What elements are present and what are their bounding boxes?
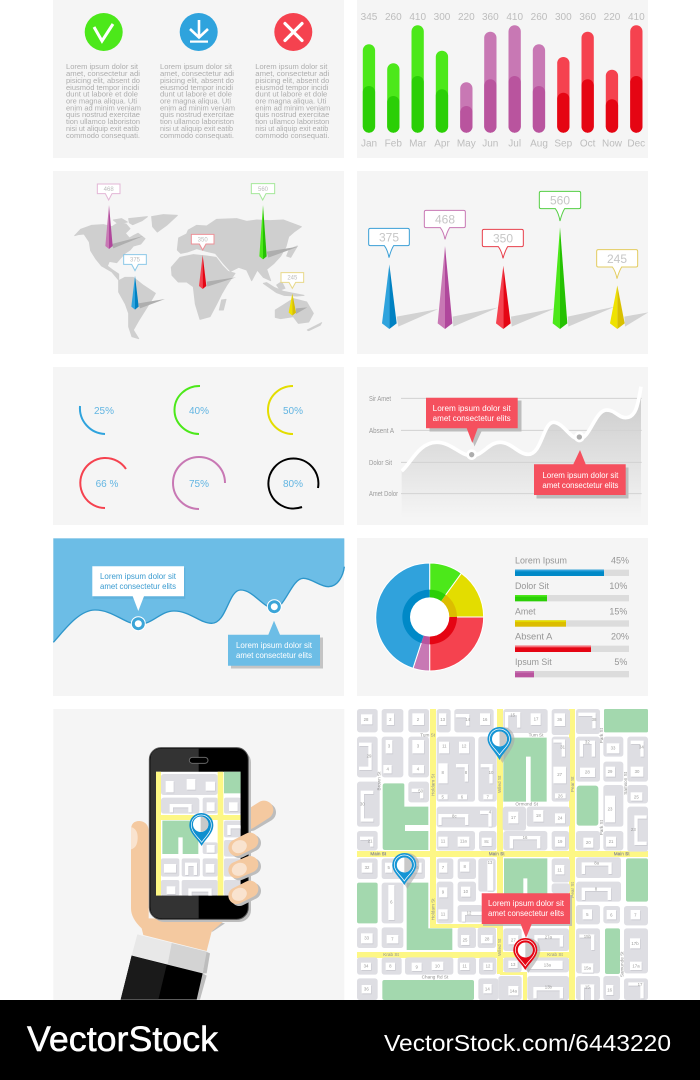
month labels: May: [457, 138, 476, 150]
map quadrant: north west: 10: [489, 770, 494, 775]
map quadrant: south east: 5: [586, 912, 589, 917]
bars: green Jan to Apr: [363, 25, 448, 133]
map quadrant: south west: 8: [463, 864, 466, 869]
pin: pink 468: 468: [435, 213, 455, 227]
map quadrant: north west: 4: [417, 766, 420, 771]
bar values: 300: [555, 12, 572, 23]
bar values: 410: [628, 12, 645, 23]
map quadrant: north west: 11: [441, 839, 446, 844]
map quadrant: south east: 16: [607, 988, 613, 993]
donut chart: [376, 563, 484, 671]
icon: three fingers: [230, 838, 253, 903]
world map: [75, 215, 322, 339]
map quadrant: south east: 13b: [545, 984, 553, 989]
map quadrant: north east: 29: [608, 769, 613, 774]
map quadrant: north west: Wiled St: [497, 775, 502, 793]
map quadrant: south west: 9: [415, 964, 418, 969]
text block: column three: enim ad minim veniam: [255, 104, 330, 112]
pin: green 560: [539, 191, 581, 329]
map quadrant: south east: 11: [557, 867, 563, 872]
map quadrant: south west: 6: [416, 865, 419, 870]
map quadrant: south east: 13a: [544, 963, 552, 968]
map quadrant: south east: 7: [634, 912, 637, 917]
map quadrant: south west: 34: [364, 964, 369, 969]
footer url: VectorStock.com/6443220: [384, 1030, 671, 1056]
gauge: 40%: [174, 386, 209, 434]
text block: column two: dunt ut labore et dole: [160, 90, 232, 98]
map quadrant: south east: 27a: [545, 934, 553, 939]
bar values: 410: [409, 12, 426, 23]
bar: Ipsum Sit: 5%: [614, 657, 627, 667]
map quadrant: north east: 19: [558, 839, 563, 844]
map quadrant: north west: 6: [461, 794, 464, 799]
map quadrant: north east: 32: [585, 740, 590, 745]
map quadrant: north west: 28: [364, 717, 369, 722]
map quadrant: north west: 4: [386, 766, 389, 771]
map quadrant: north west: 11: [442, 744, 447, 749]
pin: pink 468: [97, 184, 143, 249]
pin: blue 375: 375: [379, 231, 399, 245]
map quadrant: south west: 11: [441, 912, 446, 917]
map quadrant: north east: 36: [557, 717, 563, 722]
map quadrant: south west: Wiled St: [497, 938, 502, 956]
callout: blue: [228, 621, 323, 668]
text block: column one: pisicing elit, absent do: [66, 76, 140, 85]
map quadrant: north west: 8: [465, 770, 468, 775]
map quadrant: south west: 7: [442, 865, 445, 870]
map quadrant: south east: [498, 851, 648, 1000]
bar: Absent A: 20%: [611, 632, 629, 642]
panel: 3D pins chart: [357, 171, 648, 354]
pin: red 350: 350: [493, 232, 513, 246]
callout: white: Lorem ipsum dolor sit: [100, 572, 177, 581]
pin: red 350: 350: [198, 237, 208, 243]
map quadrant: north east: Ormond St: [515, 801, 539, 806]
map quadrant: north east: Pear St: [570, 776, 575, 792]
gauge: 66%: 66 %: [96, 479, 119, 490]
text block: column two: [160, 62, 235, 140]
map quadrant: north west: 2: [417, 717, 420, 722]
map quadrant: north east: 31: [560, 744, 566, 749]
text block: column three: tion ullamco laboriston: [255, 117, 329, 126]
map quadrant: north west: 29: [367, 754, 372, 759]
map quadrant: south west: Holdam St: [430, 898, 435, 920]
text block: column three: commodo consequati.: [255, 131, 329, 140]
map callout: [482, 893, 572, 938]
bar values: 260: [385, 12, 402, 23]
bar values: 220: [604, 12, 621, 23]
map quadrant: north west: 8c: [484, 839, 490, 844]
icon: red cross: [274, 13, 312, 51]
bars: pink May to Aug: [460, 25, 545, 133]
gauge: 25%: 25%: [94, 406, 114, 417]
pin: green 560: 560: [550, 194, 570, 208]
bar values: 360: [482, 12, 499, 23]
text block: column one: enim ad minim veniam: [66, 104, 141, 112]
map quadrant: north west: Tum St: [420, 733, 436, 738]
map quadrant: north west: 2: [389, 717, 392, 722]
marker: right: [267, 600, 281, 614]
bar: Lorem Ipsum: 45%: [611, 556, 629, 566]
map quadrant: north west: Main St: [489, 851, 505, 856]
map quadrant: south west: 13: [488, 860, 493, 865]
bar values: 410: [506, 12, 523, 23]
month labels: Feb: [385, 138, 402, 150]
text block: column one: commodo consequati.: [66, 131, 140, 140]
text block: column three: amet, consectetur adi: [255, 69, 330, 78]
blue wave: [53, 538, 344, 642]
panel: monthly bar chart: [357, 0, 648, 158]
map pin: red: [513, 938, 540, 973]
pin: green 560: 560: [258, 187, 269, 193]
text block: column two: amet, consectetur adi: [160, 69, 234, 78]
map quadrant: north east: 23: [631, 827, 636, 832]
map callout: Lorem ipsum dolor sit: [488, 899, 565, 908]
map quadrant: north east: Park St: [599, 727, 604, 743]
bar: Ipsum Sit: [515, 657, 629, 677]
map quadrant: south east: 17b: [631, 941, 639, 946]
map quadrant: north east: 33: [611, 746, 616, 751]
map quadrant: north west: 11a: [460, 839, 467, 844]
text block: column three: Lorem ipsum dolor sit: [255, 62, 327, 71]
text block: column two: pisicing elit, absent do: [160, 76, 234, 85]
map quadrant: north east: 28: [585, 770, 590, 775]
text block: column one: amet, consectetur adi: [66, 69, 140, 78]
panel: hand holding phone: [53, 709, 344, 1000]
map quadrant: north west: 16: [483, 717, 488, 722]
map quadrant: north west: 7: [486, 794, 489, 799]
map quadrant: north east: 23: [608, 806, 613, 811]
map quadrant: south west: [357, 851, 505, 1000]
gauge: 75%: 75%: [189, 479, 209, 490]
map quadrant: north east: 30: [635, 769, 640, 774]
text block: column three: eiusmod tempor incidi: [255, 83, 329, 92]
callout: blue: Lorem ipsum dolor sit: [236, 641, 313, 650]
map quadrant: north west: 3: [388, 744, 391, 749]
text block: column one: [66, 62, 141, 140]
map quadrant: north east: 15: [510, 712, 516, 717]
month labels: Mar: [409, 138, 427, 150]
panel: world map with pins: [53, 171, 344, 354]
pin: blue 375: [369, 228, 409, 329]
map quadrant: north west: 8c: [452, 814, 457, 819]
map quadrant: south east: 17a: [632, 964, 640, 969]
pin shadows: [397, 307, 648, 327]
map quadrant: south west: 28: [485, 937, 490, 942]
icon: phone map pin: [189, 813, 213, 846]
map quadrant: north west: 5: [441, 794, 444, 799]
map pin: blue north: [488, 727, 514, 763]
month labels: Sep: [554, 138, 573, 150]
gauge: 80%: [268, 459, 318, 509]
panel: blue wave chart: [53, 538, 344, 696]
icon: shirt cuff: [132, 934, 210, 973]
pin: yellow 245: [281, 273, 307, 316]
bar values: 345: [361, 12, 378, 23]
pin: red 350: [482, 229, 523, 329]
map quadrant: south east: 15b: [584, 934, 592, 939]
map quadrant: south west: 7: [391, 937, 394, 942]
map quadrant: south west: 6: [390, 899, 393, 904]
map quadrant: north east: 17: [511, 815, 516, 820]
map quadrant: south east: Krab St: [547, 952, 563, 957]
map quadrant: north west: 3: [417, 744, 420, 749]
bar: Absent A: Absent A: [515, 632, 552, 642]
map quadrant: south east: 6: [610, 912, 613, 917]
map quadrant: north west: 12: [462, 744, 467, 749]
text block: column one: quis nostrud exercitae: [66, 110, 140, 119]
map quadrant: north west: [357, 709, 505, 856]
map quadrant: south west: Chang Rd St: [422, 974, 449, 979]
map quadrant: south east: Samunde St: [620, 951, 625, 977]
map callout: amet consectetur elits: [488, 909, 564, 918]
panel: city street map: [357, 709, 648, 1000]
map quadrant: north west: 4: [489, 809, 492, 814]
text block: column one: tion ullamco laboriston: [66, 117, 140, 126]
icon: back finger: [248, 810, 267, 822]
bar: Ipsum Sit: Ipsum Sit: [515, 657, 552, 667]
map quadrant: north east: Tum St: [529, 732, 544, 737]
text block: column two: enim ad minim veniam: [160, 104, 235, 112]
icon: hand palm and thumb: [131, 821, 225, 951]
bar values: 260: [531, 12, 548, 23]
map quadrant: north east: Park St: [599, 819, 604, 835]
text block: column one: Lorem ipsum dolor sit: [66, 62, 138, 71]
pin: red 350: [191, 234, 236, 289]
bar values: 300: [434, 12, 451, 23]
gauge: 66%: [80, 458, 126, 508]
bar: Dolor Sit: Dolor Sit: [515, 581, 549, 591]
text block: column one: eiusmod tempor incidi: [66, 83, 139, 92]
bar: Amet: [515, 606, 629, 627]
map quadrant: north east: 21: [609, 839, 614, 844]
map quadrant: north east: 16: [523, 835, 528, 840]
month labels: Oct: [580, 138, 596, 150]
icon: phone: [149, 748, 251, 922]
text block: column three: dunt ut labore et dole: [255, 90, 327, 98]
map quadrant: south west: 25: [463, 937, 468, 942]
gauge: 50%: 50%: [283, 406, 303, 417]
pin: green 560: [251, 184, 298, 259]
text block: column two: quis nostrud exercitae: [160, 110, 234, 119]
month labels: Apr: [434, 138, 450, 150]
map quadrant: north west: Main St: [370, 851, 387, 856]
text block: column two: tion ullamco laboriston: [160, 117, 234, 126]
callout: white: amet consectetur elits: [100, 582, 176, 591]
map quadrant: south east: Main St: [614, 851, 630, 856]
map quadrant: south east: 17: [638, 982, 643, 987]
text block: column one: nisi ut aliquip exit eatib: [66, 124, 139, 133]
text block: column three: ore magna aliqua. Uti: [255, 96, 327, 106]
map quadrant: north west: 8: [441, 770, 444, 775]
map quadrant: north east: [503, 709, 648, 856]
map quadrant: south east: 15: [585, 985, 590, 990]
icon: blue download: [180, 13, 218, 51]
map quadrant: north east: 18: [536, 813, 541, 818]
map quadrant: south east: 8: [595, 887, 598, 892]
panel: status icons and text: [53, 0, 344, 158]
map quadrant: south west: 14: [485, 986, 490, 991]
map quadrant: north west: 13: [440, 717, 446, 722]
map quadrant: south east: 27: [511, 937, 516, 942]
map quadrant: north west: 30: [360, 802, 365, 807]
gauge: 40%: 40%: [189, 406, 209, 417]
map quadrant: south west: 11: [462, 964, 468, 969]
marker: left: [131, 617, 145, 631]
text block: column two: Lorem ipsum dolor sit: [160, 62, 232, 71]
text block: column two: nisi ut aliquip exit eatib: [160, 124, 233, 133]
map quadrant: south west: 9: [442, 890, 445, 895]
map quadrant: north east: 25: [634, 794, 639, 799]
pin: yellow 245: [597, 250, 638, 329]
gauge: 80%: 80%: [283, 479, 303, 490]
text block: column one: dunt ut labore et dole: [66, 90, 138, 98]
callout: lower: Lorem ipsum dolor sit: [542, 471, 619, 480]
map quadrant: north east: 17: [534, 716, 539, 721]
gauge: 75%: [173, 457, 225, 509]
month labels: Aug: [530, 138, 548, 150]
text block: column three: quis nostrud exercitae: [255, 110, 329, 119]
map quadrant: south west: Main St: [370, 851, 387, 856]
map quadrant: south east: Pear St: [570, 882, 575, 898]
map quadrant: north west: Holdam St: [430, 773, 435, 796]
icon: green check: [85, 13, 123, 51]
callout: lower: amet consectetur elits: [542, 481, 618, 490]
map quadrant: south west: 33: [364, 936, 370, 941]
month labels: [361, 138, 645, 150]
month labels: Jul: [508, 138, 521, 150]
month labels: Jun: [482, 138, 498, 150]
footer logo: VectorStock: [27, 1020, 219, 1059]
gauge: 50%: [268, 386, 303, 434]
bar: Dolor Sit: [515, 581, 629, 601]
map quadrant: south west: Krab St: [383, 952, 399, 957]
bar values: [361, 12, 645, 23]
pin: pink 468: 468: [104, 187, 114, 193]
map quadrant: south east: 15a: [584, 966, 592, 971]
gauge: 25%: [80, 406, 114, 434]
bars: red Sep to Dec: [557, 25, 642, 133]
yellow roads: [357, 709, 648, 1000]
map quadrant: south west: 12: [486, 964, 491, 969]
text block: column two: eiusmod tempor incidi: [160, 83, 233, 92]
chart area: [401, 387, 642, 518]
map quadrant: north east: 38: [592, 717, 597, 722]
text block: column two: commodo consequati.: [160, 131, 234, 140]
map quadrant: north west: 21: [368, 838, 373, 843]
bar values: 360: [579, 12, 596, 23]
month labels: Dec: [627, 138, 645, 150]
text block: column two: ore magna aliqua. Uti: [160, 96, 231, 106]
map quadrant: south east: 8a: [594, 861, 600, 866]
callout: white: [92, 566, 185, 611]
map quadrant: south west: 10: [463, 889, 469, 894]
map quadrant: north west: 50: [418, 789, 424, 794]
month labels: Jan: [361, 138, 377, 150]
callout: upper: [426, 398, 522, 446]
callout: upper: amet consectetur elits: [433, 414, 511, 423]
map quadrant: north east: 24: [558, 816, 563, 821]
panel: percentage gauges: [53, 367, 344, 525]
map quadrant: south east: 14a: [510, 988, 518, 993]
map quadrant: south west: 36: [364, 987, 369, 992]
text block: column one: ore magna aliqua. Uti: [66, 96, 137, 106]
pin: yellow 245: 245: [287, 276, 298, 282]
map quadrant: north west: Brown St: [377, 771, 382, 790]
map quadrant: south east: 13: [511, 962, 516, 967]
map quadrant: north east: 20: [586, 840, 591, 845]
bar: Amet: Amet: [515, 606, 536, 616]
phone screen map: [156, 772, 241, 897]
callout: lower: [534, 450, 628, 498]
pin: yellow 245: 245: [607, 252, 627, 266]
map quadrant: south west: 32: [365, 865, 370, 870]
callout: upper: Lorem ipsum dolor sit: [433, 404, 511, 413]
axis labels: [369, 394, 398, 498]
bar: Amet: 15%: [609, 606, 627, 616]
axis labels: Absent A: [369, 426, 394, 435]
map quadrant: north west: 14: [465, 717, 471, 722]
bar: Lorem Ipsum: Lorem Ipsum: [515, 556, 567, 566]
axis labels: Dolor Sit: [369, 458, 393, 467]
bar: Absent A: [515, 632, 629, 652]
bar: Dolor Sit: 10%: [609, 581, 627, 591]
month labels: Now: [602, 138, 623, 150]
pin: blue 375: [124, 255, 165, 310]
callout: blue: amet consectetur elits: [236, 651, 312, 660]
text block: column three: [255, 62, 330, 140]
axis labels: Sir Amet: [369, 394, 392, 403]
pin: blue 375: 375: [130, 258, 141, 264]
map quadrant: north east: 34: [639, 744, 644, 749]
map pin: blue west: [392, 853, 419, 889]
axis labels: Amet Dolor: [369, 489, 398, 498]
text block: column three: pisicing elit, absent do: [255, 76, 329, 85]
map quadrant: north east: Samson St: [623, 771, 628, 795]
bar values: 220: [458, 12, 475, 23]
text block: column three: nisi ut aliquip exit eatib: [255, 124, 328, 133]
icon: jacket sleeve: [121, 956, 207, 1000]
panel: donut chart and progress bars: [357, 538, 648, 696]
map quadrant: south west: 10: [435, 963, 440, 968]
bar: Lorem Ipsum: [515, 556, 629, 576]
map quadrant: north east: 27: [557, 772, 563, 777]
panel: gray area line chart: [357, 367, 648, 525]
map quadrant: south west: 8: [389, 964, 392, 969]
map quadrant: south west: 5: [387, 865, 390, 870]
map quadrant: north east: 26: [558, 794, 563, 799]
footer: watermark band: [0, 1000, 700, 1080]
pin: pink 468: [424, 210, 465, 329]
map quadrant: north east: Main St: [614, 851, 630, 856]
map quadrant: south west: Main St: [489, 851, 505, 856]
map quadrant: south west: 12: [467, 911, 472, 916]
